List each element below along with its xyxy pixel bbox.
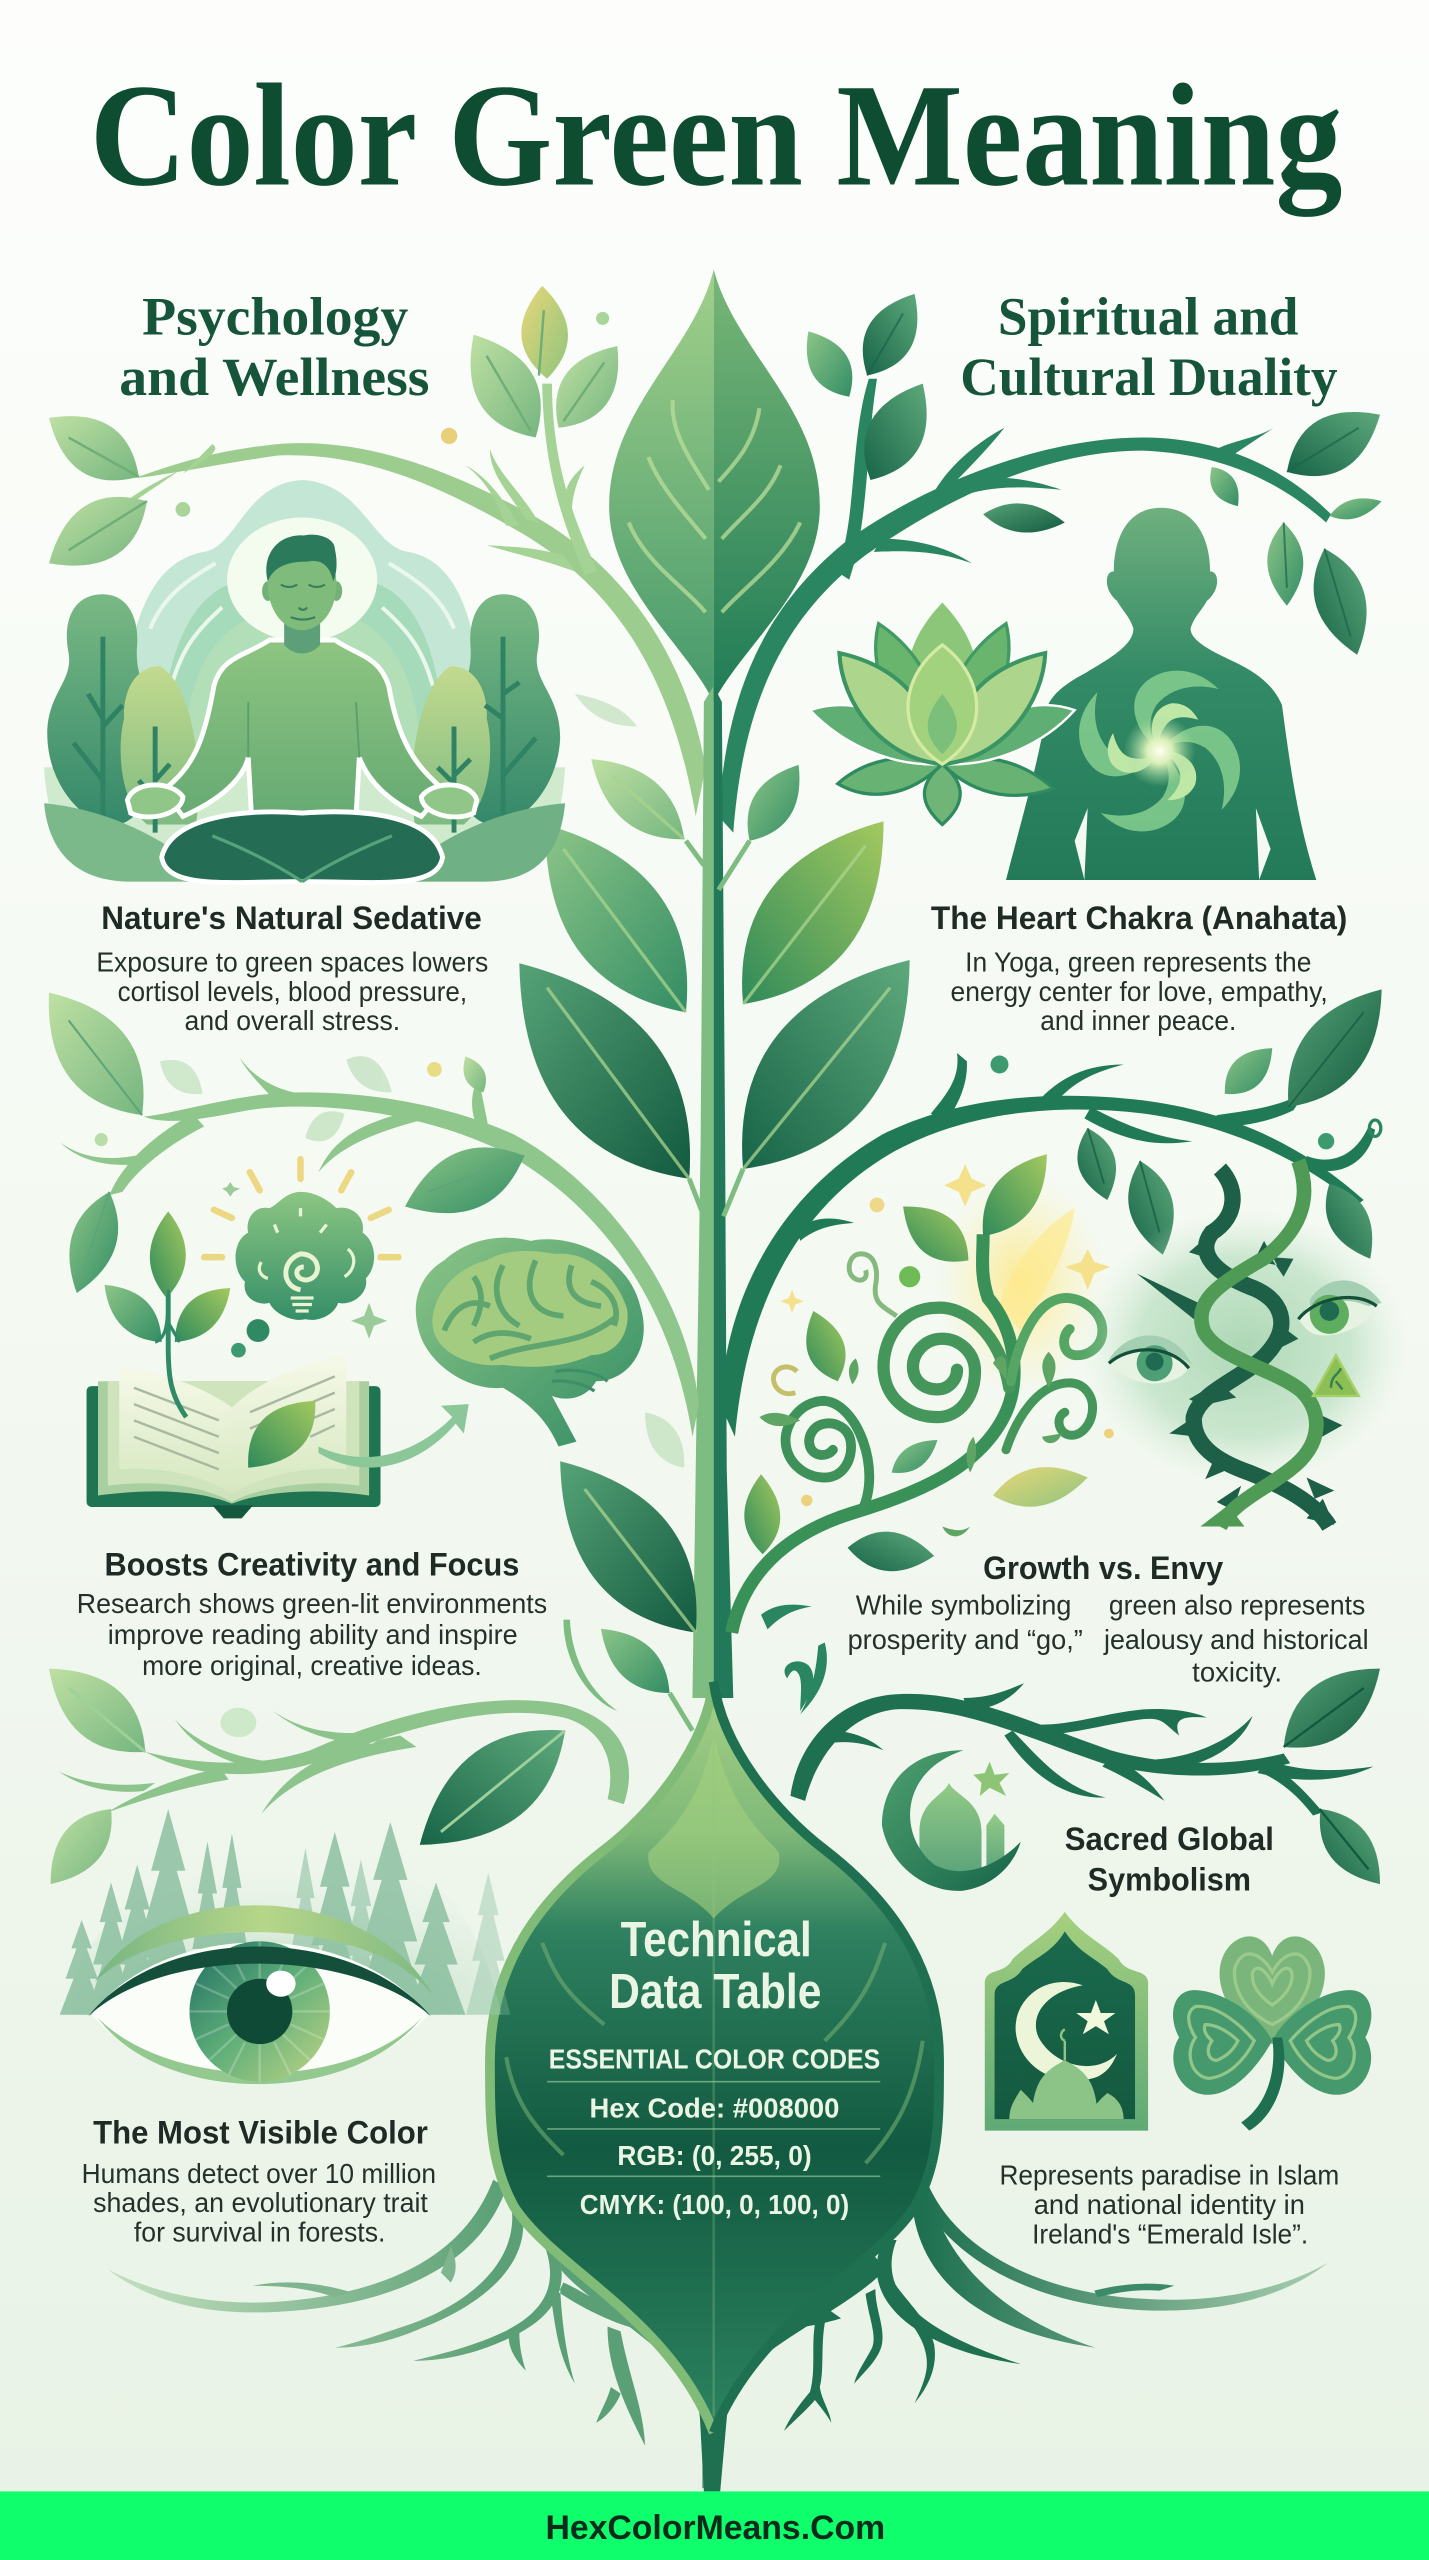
text: sacred global symbolism: Sacred Global — [1065, 1820, 1274, 1857]
leaf left large — [519, 963, 690, 1179]
text: growth vs envy: green also represents — [1109, 1590, 1365, 1621]
left eye — [1109, 1346, 1189, 1383]
right eye — [1298, 1292, 1377, 1336]
middle left branch — [49, 694, 699, 1468]
upper right branch — [719, 294, 1382, 833]
heading: spiritual and cultural duality: Cultural Duality — [960, 347, 1338, 407]
hills — [44, 803, 212, 882]
faded blob — [220, 1708, 256, 1737]
illustration: heart chakra silhouette — [1006, 508, 1316, 880]
footer band: HexColorMeans.Com — [545, 2509, 885, 2547]
heading: psychology and wellness — [119, 287, 430, 407]
leaf lower — [560, 1461, 697, 1633]
sparkles and dots — [781, 1164, 1111, 1313]
text: most visible color: for survival in forests. — [134, 2217, 385, 2248]
leaf — [49, 416, 139, 480]
leaf — [1284, 1669, 1380, 1748]
heading: spiritual and cultural duality — [960, 287, 1338, 407]
illustration: lotus — [810, 602, 1075, 824]
right roots — [915, 2180, 1328, 2311]
text: sacred global symbolism: and national identity in — [1034, 2189, 1305, 2220]
cmyk row: CMYK: (100, 0, 100, 0) — [580, 2189, 849, 2220]
legs — [162, 812, 443, 883]
haze — [1081, 1208, 1408, 1486]
central leaf — [609, 269, 820, 702]
illustration: meditating man in nature — [44, 480, 565, 883]
leaf right upper — [742, 821, 884, 1004]
leaf — [1326, 1184, 1372, 1259]
leaf small — [748, 765, 799, 841]
left roots — [108, 2180, 506, 2312]
text: heart chakra: and inner peace. — [1040, 1005, 1236, 1036]
iris — [189, 1941, 330, 2082]
text: growth vs envy: jealousy and historical — [1103, 1624, 1369, 1655]
heading: spiritual and cultural duality: Spiritual and — [998, 287, 1298, 347]
text: nature's natural sedative: and overall stress. — [185, 1005, 400, 1036]
text: sacred global symbolism — [999, 1820, 1339, 2249]
leaf — [405, 1147, 524, 1213]
leaf left upper — [545, 824, 687, 1012]
text: nature's natural sedative: Nature's Natural Sedative — [101, 899, 482, 936]
leaf — [1288, 989, 1382, 1107]
text: growth vs envy: toxicity. — [1192, 1657, 1282, 1688]
text: growth vs envy: Growth vs. Envy — [983, 1549, 1223, 1586]
eye white — [91, 1942, 428, 2080]
text: heart chakra — [931, 899, 1347, 1036]
stem leaves — [519, 759, 910, 1731]
leaf — [1077, 1128, 1116, 1200]
text: most visible color: The Most Visible Color — [93, 2114, 428, 2151]
table heading: ESSENTIAL COLOR CODES — [549, 2044, 880, 2075]
head — [284, 620, 320, 653]
text: boosts creativity: Boosts Creativity and Focus — [105, 1546, 519, 1583]
text: sacred global symbolism: Symbolism — [1088, 1861, 1251, 1898]
panel: technical data bulb: Data Table — [609, 1965, 821, 2019]
arrow — [318, 1404, 469, 1468]
central stem — [692, 686, 733, 1698]
ground — [44, 767, 565, 882]
illustration: crescent and mosque — [882, 1750, 1021, 1891]
illustration: eye with forest — [60, 1809, 510, 2084]
leaf big — [420, 1730, 565, 1845]
pines — [60, 1809, 510, 2015]
pages — [98, 1381, 369, 1504]
thorns — [1137, 1233, 1342, 1525]
heart swirl — [1079, 671, 1240, 831]
leaf — [807, 331, 852, 397]
illustration: arch with crescent — [985, 1912, 1148, 2131]
trees — [47, 594, 156, 824]
leaf — [1225, 1048, 1272, 1094]
text: heart chakra: The Heart Chakra (Anahata) — [931, 899, 1347, 936]
leaf — [983, 503, 1065, 533]
pupil — [227, 1979, 292, 2044]
title: Color Green Meaning — [90, 54, 1342, 216]
crescent — [882, 1750, 1021, 1891]
leaf right large — [742, 960, 910, 1169]
leaf — [1329, 498, 1382, 519]
minaret — [986, 1814, 1004, 1871]
text: sacred global symbolism: Ireland's “Emerald Isle”. — [1032, 2218, 1308, 2249]
leaf — [1287, 412, 1380, 476]
light strand — [1201, 1161, 1316, 1527]
roots — [108, 2180, 1328, 2491]
bulb — [490, 1682, 939, 2433]
leaf — [471, 335, 541, 438]
leaf on book — [248, 1401, 315, 1468]
heading: psychology and wellness: Psychology — [142, 287, 408, 347]
dots — [176, 312, 609, 517]
spirals — [884, 1308, 1009, 1417]
rgb row: RGB: (0, 255, 0) — [617, 2140, 812, 2171]
lower rim — [98, 2018, 421, 2084]
stem — [732, 1234, 1014, 1633]
illustration: envy thorns and eyes — [1081, 1161, 1408, 1527]
text: sacred global symbolism: Represents paradise in Islam — [999, 2159, 1339, 2190]
halo — [227, 518, 377, 642]
panel title: Technical — [621, 1913, 812, 1967]
warning sign — [1313, 1355, 1359, 1396]
leaf yellow — [521, 286, 568, 379]
forest haze — [62, 1826, 501, 2015]
text: nature's natural sedative — [96, 899, 488, 1036]
body — [163, 640, 444, 816]
leaf — [69, 1192, 118, 1293]
leaf small — [591, 759, 684, 839]
leaf — [51, 1809, 112, 1884]
dark strand — [1194, 1169, 1329, 1527]
cover — [87, 1386, 381, 1507]
lower left branch — [49, 1669, 629, 1884]
leaf — [49, 1669, 145, 1752]
leaf — [863, 294, 917, 376]
middle right branch — [720, 989, 1382, 1437]
leaf — [1314, 549, 1367, 655]
leaf — [1210, 467, 1239, 506]
glow — [936, 1171, 1106, 1393]
text: boosts creativity — [77, 1546, 547, 1681]
aura — [122, 480, 484, 800]
hex row: Hex Code: #008000 — [590, 2093, 839, 2124]
text: boosts creativity: Research shows green-lit environments — [77, 1588, 547, 1619]
text: most visible color: shades, an evolutionary trait — [93, 2187, 428, 2218]
text: most visible color: Humans detect over 10 million — [82, 2158, 436, 2189]
illustration: growth vine — [732, 1154, 1114, 1633]
lid band — [95, 1905, 433, 1995]
illustration: open book with plant — [87, 1211, 469, 1518]
text: heart chakra: In Yoga, green represents the — [965, 946, 1311, 977]
leaf — [556, 346, 618, 428]
heading: psychology and wellness: and Wellness — [119, 347, 430, 407]
illustration: idea cloud — [204, 1159, 398, 1358]
lower right branch — [790, 1669, 1380, 1884]
star — [973, 1762, 1009, 1796]
text: growth vs envy — [848, 1549, 1369, 1688]
illustration: brain — [416, 1238, 644, 1447]
sprout — [105, 1211, 230, 1417]
upper left branch — [49, 286, 706, 816]
text: nature's natural sedative: Exposure to green spaces lowers — [96, 946, 488, 977]
leaf — [1128, 1161, 1174, 1255]
leaf — [49, 993, 144, 1115]
text: heart chakra: energy center for love, empathy, — [950, 976, 1328, 1007]
panel: technical data bulb — [490, 1682, 939, 2433]
leaf small lower — [601, 1629, 670, 1693]
leaf — [1267, 522, 1303, 606]
dome — [919, 1783, 982, 1871]
silhouette — [1006, 508, 1316, 880]
leaves — [983, 1154, 1047, 1236]
text: nature's natural sedative: cortisol levels, blood pressure, — [118, 976, 467, 1007]
text: growth vs envy: While symbolizing — [856, 1590, 1071, 1621]
footer band — [0, 2491, 1429, 2560]
text: boosts creativity: more original, creative ideas. — [142, 1650, 482, 1681]
text: most visible color — [82, 2114, 436, 2248]
text: growth vs envy: prosperity and “go,” — [848, 1624, 1083, 1655]
leaf — [464, 1056, 486, 1092]
leaf — [49, 497, 147, 566]
illustration: celtic shamrock — [1173, 1936, 1371, 2131]
faded leaves — [160, 694, 684, 1468]
text: boosts creativity: improve reading ability and inspire — [108, 1619, 518, 1650]
leaf — [1320, 1809, 1380, 1884]
leaf — [864, 384, 927, 480]
hands — [127, 785, 183, 817]
lower vine curls — [563, 1605, 827, 1714]
upper lid line — [88, 1947, 431, 2016]
